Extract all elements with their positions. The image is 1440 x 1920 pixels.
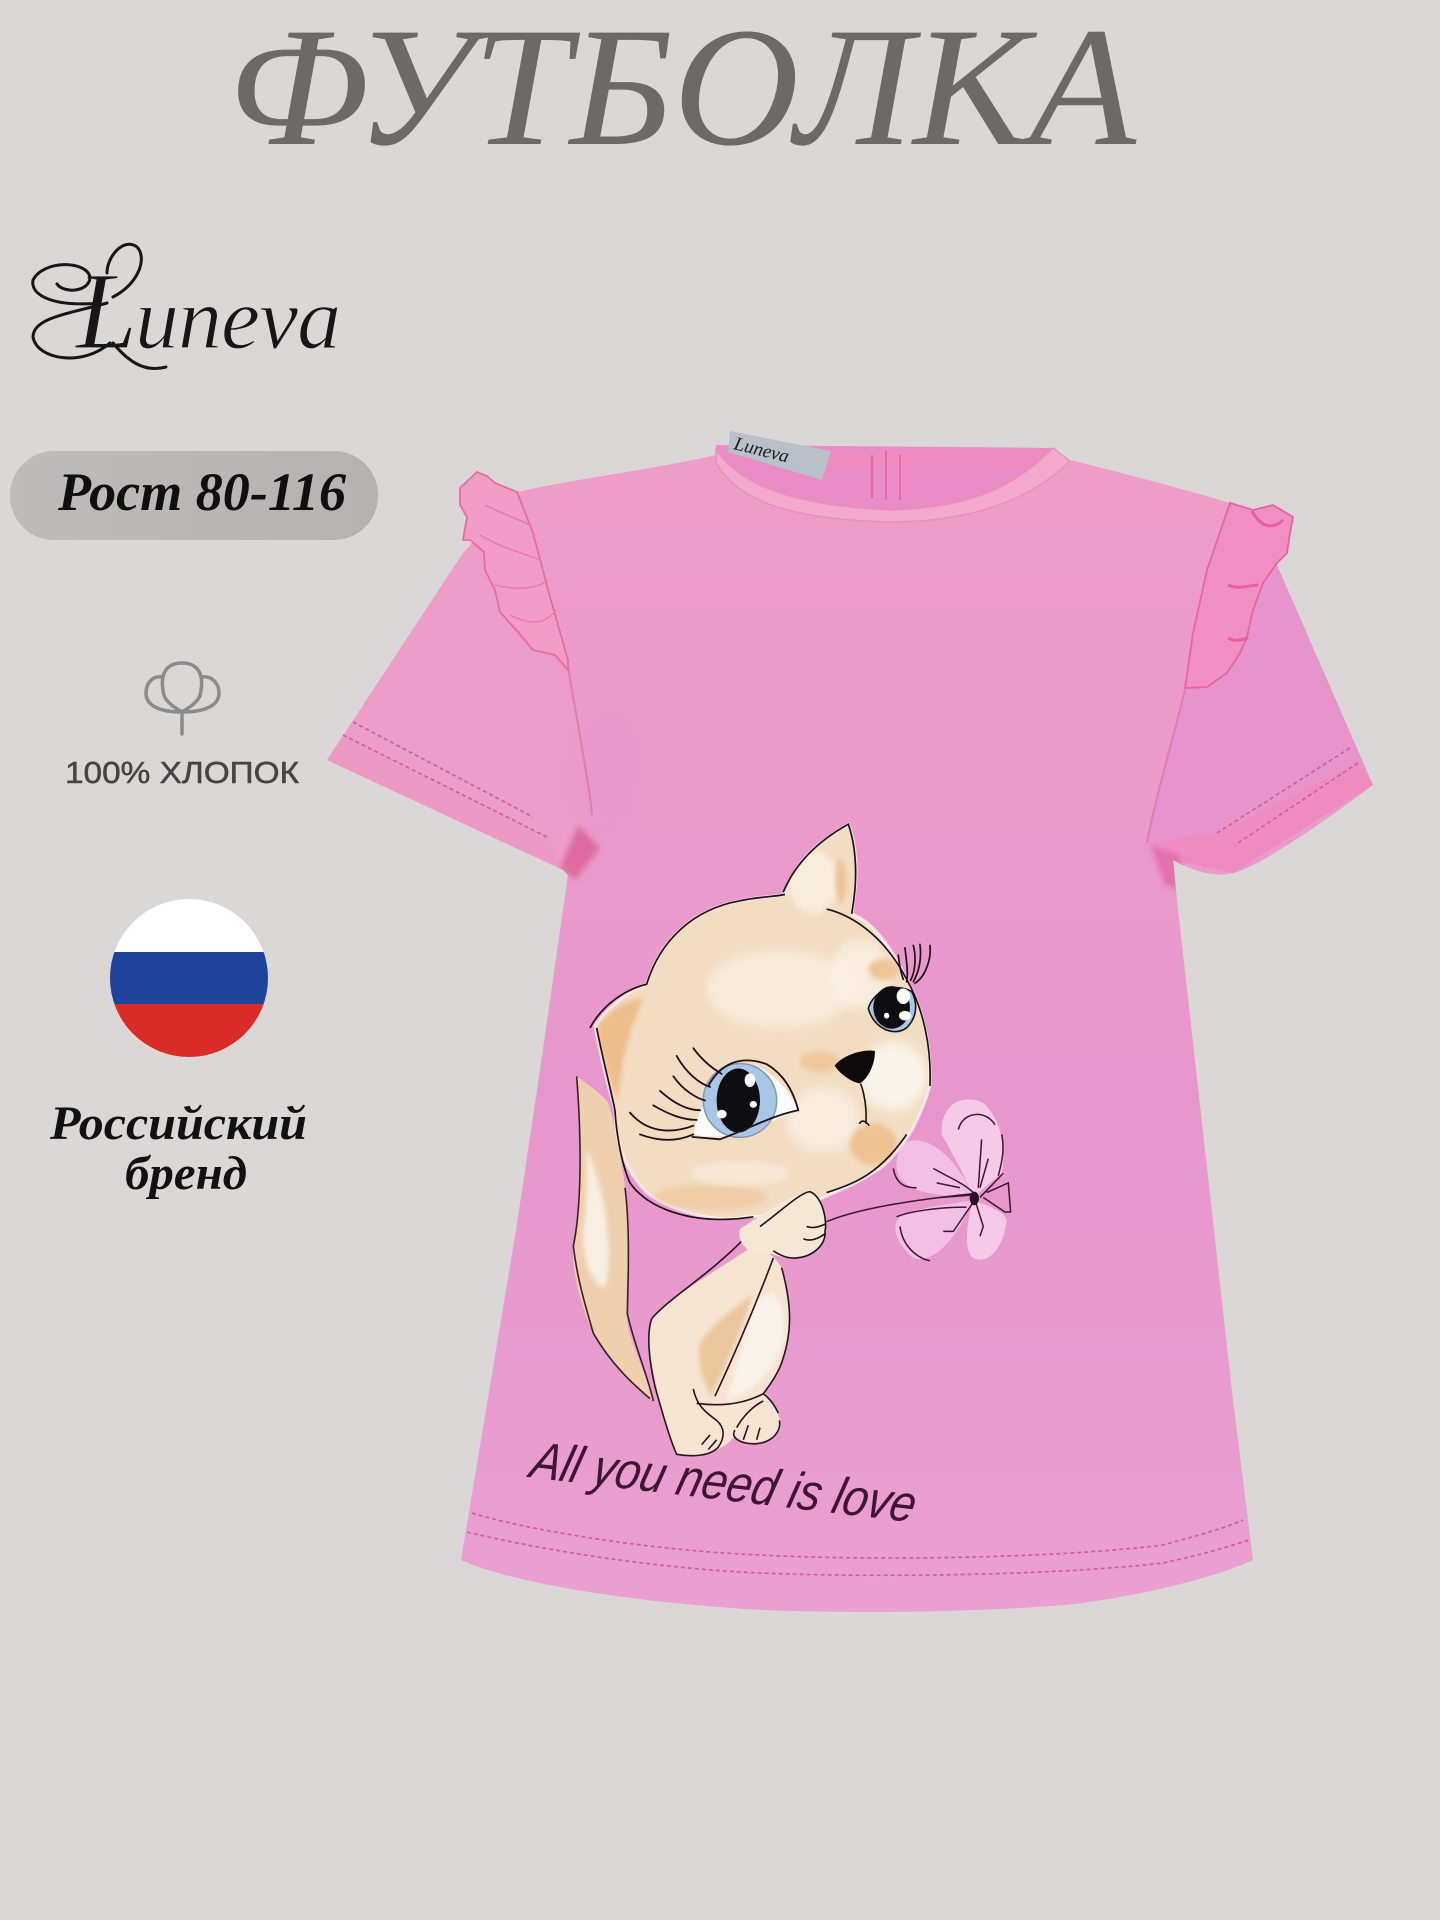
small eye lashes	[898, 944, 930, 983]
logo: Luneva	[33, 244, 340, 372]
brand text: Российский	[49, 1097, 307, 1150]
right ruffle	[1185, 503, 1293, 688]
logo: Luneva: L	[74, 250, 137, 372]
shirt inner back neck	[716, 445, 1060, 520]
brand text: бренд	[125, 1147, 247, 1200]
logo: Luneva: uneva	[135, 271, 340, 368]
cotton label: 100% ХЛОПОК	[65, 755, 299, 790]
cat arm and paw	[739, 1192, 826, 1258]
cat tail	[573, 1076, 653, 1401]
cat head	[590, 824, 930, 1219]
back placket	[872, 451, 900, 500]
icon: cotton	[146, 663, 219, 734]
shirt main body	[327, 450, 1373, 1612]
left ruffle	[460, 472, 568, 670]
sleeve seams	[568, 667, 1185, 843]
flower	[827, 1099, 1011, 1260]
size pill: Рост 80-116	[57, 462, 346, 522]
cat body	[648, 1236, 790, 1456]
brand text	[49, 1097, 307, 1200]
back neck band	[826, 449, 1053, 470]
neck tag: Luneva	[731, 433, 791, 467]
slogan: All you need is love	[522, 1432, 923, 1534]
t-shirt	[327, 431, 1373, 1612]
stitching	[343, 722, 1358, 1575]
big eye lashes	[630, 1048, 722, 1140]
big eye	[692, 1060, 798, 1139]
cat nose and mouth	[835, 1051, 875, 1126]
size pill	[10, 451, 378, 540]
collar band	[716, 448, 1070, 522]
small eye	[868, 986, 916, 1032]
sleeve and underarm shading	[327, 553, 1373, 890]
icon: russian flag	[110, 899, 268, 1057]
neck tag	[728, 431, 831, 480]
cat illustration	[573, 824, 1011, 1456]
